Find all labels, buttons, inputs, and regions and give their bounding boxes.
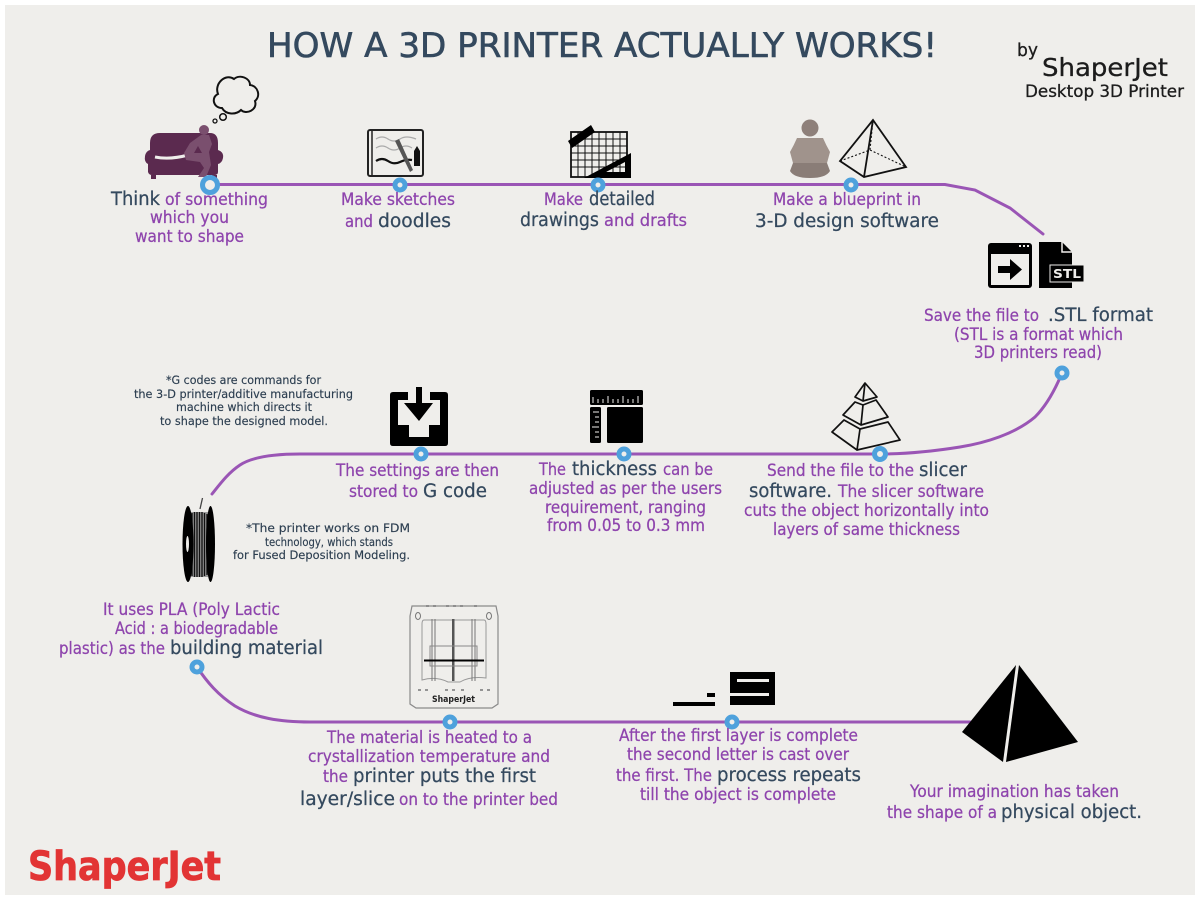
text: think: of something xyxy=(165,190,268,209)
pin xyxy=(192,662,202,672)
text: save: 3D printers read) xyxy=(974,343,1102,362)
text: sketches xyxy=(341,190,455,232)
text: slicer: cuts the object horizontally into xyxy=(744,501,989,520)
step: G code xyxy=(134,373,499,502)
text: PLA: It uses PLA (Poly Lactic xyxy=(103,600,280,619)
text: repeat: the first. The xyxy=(616,766,712,785)
text: drawings: and drafts xyxy=(604,211,687,230)
note: G codes: machine which directs it xyxy=(176,400,312,414)
text: first layer: the xyxy=(323,767,348,786)
text: PLA: plastic) as the xyxy=(59,639,165,658)
icon: sketchbook xyxy=(368,130,423,176)
text: PLA: building material xyxy=(170,638,323,659)
text: PLA: Acid : a biodegradable xyxy=(115,619,278,638)
pin xyxy=(1057,368,1067,378)
icon: seated person xyxy=(790,120,830,178)
icon: ShaperJet printer xyxy=(410,606,498,708)
step: physical object xyxy=(887,665,1142,823)
text: save xyxy=(924,305,1153,362)
byline: ShaperJet Desktop 3D Printer: by xyxy=(1017,40,1038,61)
icon: wireframe pyramid xyxy=(840,120,906,177)
text: G code step: stored to xyxy=(349,482,418,501)
text: slicer: software. xyxy=(749,481,832,502)
text: slicer: slicer xyxy=(919,460,967,481)
icon: export window xyxy=(988,243,1032,288)
text: drawings xyxy=(520,189,687,231)
text: blueprint xyxy=(755,190,939,232)
text: save: (STL is a format which xyxy=(954,325,1123,344)
pin xyxy=(727,717,737,727)
step: think xyxy=(110,77,268,246)
text: thickness xyxy=(529,459,722,535)
text: thickness: thickness xyxy=(572,459,657,480)
note: FDM: for Fused Deposition Modeling. xyxy=(233,548,410,562)
step: drawings xyxy=(520,125,687,231)
text: first layer xyxy=(300,728,558,810)
text: blueprint: Make a blueprint in xyxy=(773,190,921,209)
text: blueprint: 3-D design software xyxy=(755,211,939,232)
text: sketches: Make sketches xyxy=(341,190,455,209)
text: sketches: doodles xyxy=(378,211,451,232)
text: drawings: drawings xyxy=(520,210,599,231)
pin xyxy=(846,180,856,190)
text: save: Save the file to xyxy=(924,306,1039,325)
text: repeat: the second letter is cast over xyxy=(627,745,849,764)
text: slicer: layers of same thickness xyxy=(773,520,960,539)
text: think: want to shape xyxy=(135,227,244,246)
text: drawings: Make xyxy=(544,190,583,209)
pin xyxy=(416,449,426,459)
text: think: which you xyxy=(150,208,229,227)
icon: grid with ruler and set square xyxy=(568,125,631,178)
text: physical object xyxy=(887,782,1142,823)
note: FDM: *The printer works on FDM xyxy=(246,521,410,535)
note: G codes: to shape the designed model. xyxy=(160,414,328,428)
step: thickness xyxy=(529,390,722,535)
icon: solid pyramid xyxy=(962,665,1078,762)
text: G code step: The settings are then xyxy=(335,461,499,480)
text: G code step xyxy=(335,461,499,502)
text: thickness: can be xyxy=(663,460,713,479)
icon: filament spool xyxy=(182,498,215,582)
step: slicer xyxy=(744,383,989,539)
note: G codes: *G codes are commands for xyxy=(166,373,321,387)
icon: ruler square xyxy=(590,390,643,443)
step: PLA material xyxy=(59,498,410,672)
text: slicer xyxy=(744,460,989,539)
text: physical object: Your imagination has taken xyxy=(909,782,1119,801)
text: first layer: on to the printer bed xyxy=(399,790,558,809)
text: save: .STL format xyxy=(1048,305,1153,326)
icon: ShaperJet printer: ShaperJet xyxy=(432,695,475,705)
text: physical object: physical object. xyxy=(1001,802,1142,823)
text: thickness: The xyxy=(538,460,566,479)
text: first layer: crystallization temperature and xyxy=(308,747,550,766)
byline: ShaperJet Desktop 3D Printer: ShaperJet xyxy=(1042,53,1168,82)
pin xyxy=(593,180,603,190)
title: HOW A 3D PRINTER ACTUALLY WORKS! xyxy=(267,26,937,66)
text: slicer: The slicer software xyxy=(837,482,984,501)
byline: ShaperJet Desktop 3D Printer: Desktop 3D Printer xyxy=(1025,82,1184,102)
text: PLA xyxy=(59,600,323,659)
text: slicer: Send the file to the xyxy=(767,461,914,480)
step: blueprint xyxy=(755,120,939,232)
text: think xyxy=(110,189,268,246)
text: repeat xyxy=(616,726,861,804)
text: first layer: The material is heated to a xyxy=(326,728,532,747)
note: FDM xyxy=(233,521,410,562)
pin xyxy=(202,178,218,192)
text: thickness: adjusted as per the users xyxy=(529,479,722,498)
text: first layer: layer/slice xyxy=(300,789,395,810)
step: save as STL xyxy=(924,242,1153,378)
text: first layer: printer puts the first xyxy=(353,766,536,787)
note: FDM: technology, which stands xyxy=(265,535,393,549)
step: sketches xyxy=(341,130,455,232)
logo: ShaperJet: ShaperJet xyxy=(28,844,221,890)
note: G codes xyxy=(134,373,353,428)
byline: ShaperJet Desktop 3D Printer xyxy=(1017,40,1184,102)
text: thickness: requirement, ranging xyxy=(545,498,706,517)
text: repeat: process repeats xyxy=(717,765,861,786)
text: thickness: from 0.05 to 0.3 mm xyxy=(547,516,705,535)
step: printer first layer xyxy=(300,606,558,810)
text: repeat: After the first layer is complete xyxy=(619,726,858,745)
note: G codes: the 3-D printer/additive manufacturing xyxy=(134,387,353,401)
step: layers repeat xyxy=(616,672,861,804)
icon: first layer xyxy=(673,693,715,706)
icon: stacked layers xyxy=(730,672,775,705)
pin xyxy=(445,717,455,727)
text: sketches: and xyxy=(345,212,373,231)
pin xyxy=(874,448,886,460)
timeline path xyxy=(197,184,1062,722)
pin xyxy=(619,449,629,459)
icon: STL file: STL xyxy=(1053,266,1081,281)
icon: download into tray xyxy=(390,387,448,446)
text: G code step: G code xyxy=(423,481,487,502)
text: repeat: till the object is complete xyxy=(640,785,836,804)
text: drawings: detailed xyxy=(589,189,655,210)
icon: sliced pyramid xyxy=(832,383,900,450)
icon: sofa with thinking person xyxy=(145,77,258,179)
text: physical object: the shape of a xyxy=(887,803,997,822)
icon: STL file xyxy=(1039,242,1084,288)
text: think: Think xyxy=(110,189,160,210)
pin xyxy=(395,180,405,190)
